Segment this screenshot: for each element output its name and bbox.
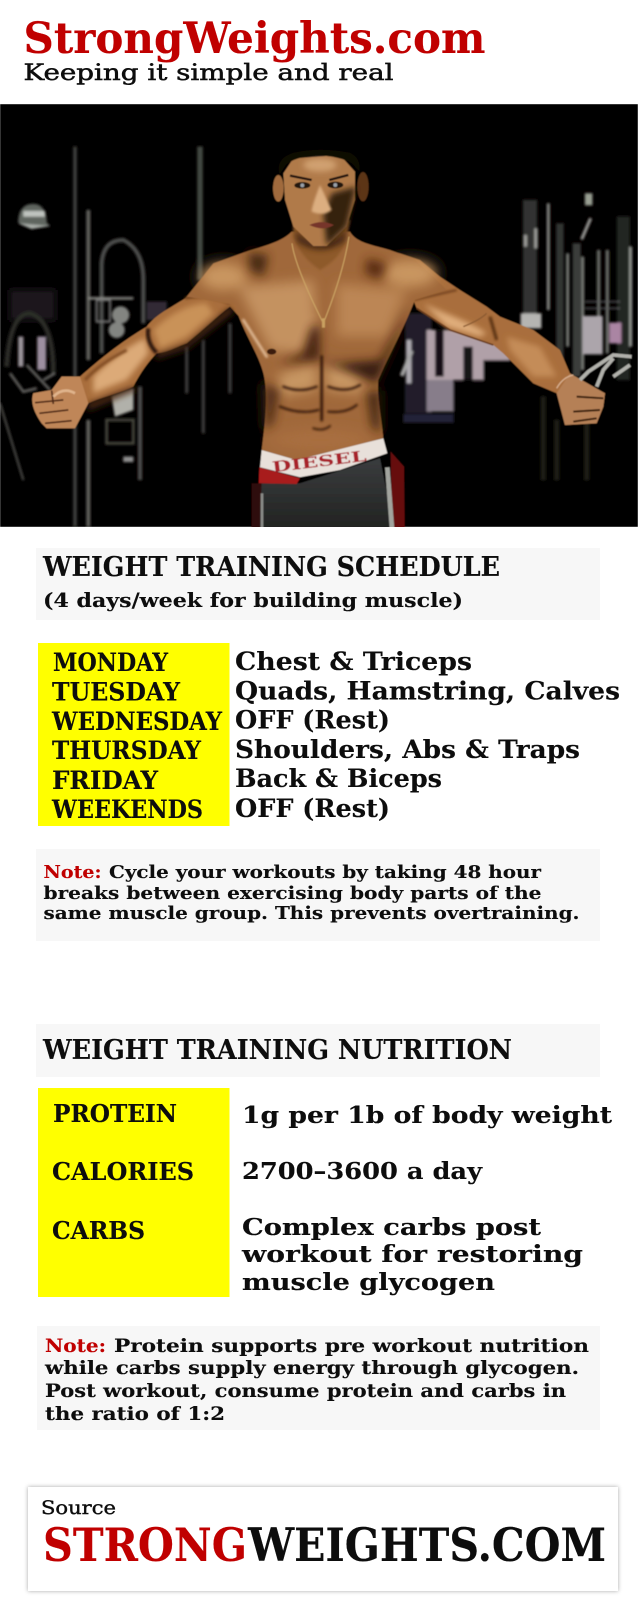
weekday labels [51,648,223,824]
source url black part: WEIGHTS.COM [247,1518,606,1572]
nutrient values: 2700–3600 a day [242,1158,483,1185]
panel: nutrition note: Protein supports pre workout nutrition [114,1336,590,1357]
hair [278,150,360,175]
nutrient labels: CALORIES [52,1157,194,1186]
weekday labels: MONDAY [53,648,169,677]
panel: nutrition heading: WEIGHT TRAINING NUTRITION [42,1035,512,1066]
workout labels [235,647,620,823]
gym equipment right [400,193,631,480]
neck [293,220,350,270]
header [24,14,486,86]
lamp [18,204,50,229]
workout labels: Shoulders, Abs & Traps [235,735,580,764]
nutrient values [241,1102,612,1296]
nutrient values: Complex carbs post [242,1214,541,1241]
source label: Source [41,1497,116,1519]
figure [32,150,632,528]
panel: schedule note: same muscle group. This prevents overtraining. [44,903,580,924]
nutrient values: workout for restoring [241,1241,583,1268]
muscle shadows [248,253,410,433]
weekday labels: WEEKENDS [51,795,203,824]
logo title: StrongWeights.com [24,14,486,64]
head [273,150,369,246]
left arm [32,250,273,428]
panel: weekly schedule table [38,643,620,826]
muscle highlights [200,260,437,452]
nose and lips [312,185,332,214]
waistband: DIESEL [271,448,367,476]
workout labels: Chest & Triceps [235,647,472,676]
panel: nutrition note [37,1326,600,1430]
panel: nutrition table [38,1088,612,1297]
workout labels: OFF (Rest) [235,794,390,823]
necklace [292,237,349,323]
panel: schedule heading [36,548,600,620]
gym equipment left [0,147,230,527]
weekday labels: TUESDAY [52,678,181,706]
panel: schedule note: breaks between exercising body parts of the [44,883,542,904]
panel: nutrition note: Note: [45,1336,106,1357]
shorts [252,452,405,528]
background window [400,313,621,480]
photo: bodybuilder in gym [0,104,638,527]
fist [557,373,605,425]
weekday labels: THURSDAY [52,736,202,765]
weekday labels: WEDNESDAY [51,707,223,736]
workout labels: Quads, Hamstring, Calves [235,676,620,706]
nutrient labels [52,1099,194,1245]
nutrient values: muscle glycogen [242,1269,495,1296]
brows and eyes [290,175,348,180]
tagline: Keeping it simple and real [24,61,394,86]
panel: nutrition note: while carbs supply energy through glycogen. [44,1358,579,1379]
torso [187,150,447,484]
panel: nutrition heading [36,1024,600,1077]
waistband [259,438,387,484]
schedule title: WEIGHT TRAINING SCHEDULE [42,552,500,583]
nutrient values: 1g per 1b of body weight [242,1102,612,1129]
panel: schedule note: Cycle your workouts by taking 48 hour [109,862,542,883]
workout labels: Back & Biceps [235,764,442,793]
weight plate [109,306,129,338]
weekday labels: FRIDAY [52,766,159,795]
panel: nutrition note: the ratio of 1:2 [45,1404,225,1425]
right arm [367,250,632,425]
nutrient labels: PROTEIN [53,1099,177,1128]
workout labels: OFF (Rest) [235,706,390,734]
panel: source box [28,1487,618,1591]
nutrient labels: CARBS [52,1216,145,1245]
panel: nutrition note: Post workout, consume protein and carbs in [45,1381,567,1402]
source url red part: STRONG [43,1518,247,1572]
cable handle [580,355,632,387]
fist [32,377,88,428]
panel: schedule note: Note: [44,862,102,883]
schedule subtitle: (4 days/week for building muscle) [43,588,463,612]
panel: schedule note [36,849,600,941]
